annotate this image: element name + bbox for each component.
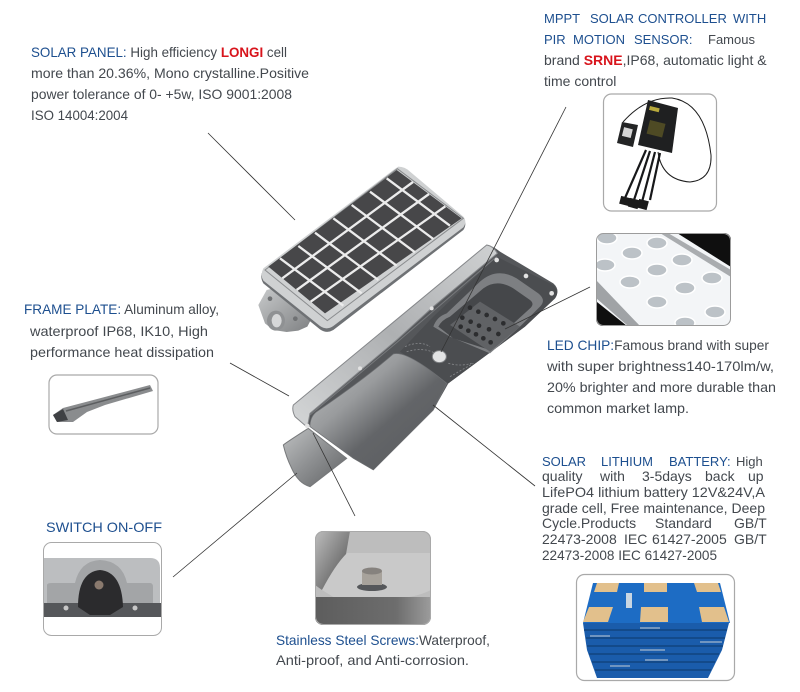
LED chip description: 20% brighter and more durable than: [547, 379, 776, 395]
battery description: up: [748, 468, 764, 484]
controller description: Famous: [708, 32, 755, 47]
LED chip description: common market lamp.: [547, 400, 689, 416]
controller description: MOTION: [573, 32, 625, 47]
battery description: back: [705, 468, 736, 484]
switch heading: SWITCH ON-OFF: [46, 519, 162, 535]
controller description: WITH: [733, 11, 766, 26]
controller description: CONTROLLER: [638, 11, 727, 26]
photo: switch: [44, 558, 161, 617]
solar panel description: SOLAR PANEL: High efficiency LONGI cell: [31, 44, 287, 60]
leader lines: [173, 107, 590, 577]
LED chip description: LED CHIP:Famous brand with super: [547, 337, 769, 353]
photo: battery pack: [576, 574, 734, 680]
battery description: with: [599, 468, 625, 484]
battery description: BATTERY:: [669, 454, 731, 469]
battery description: 22473-2008: [542, 531, 617, 547]
solar panel description: power tolerance of 0- +5w, ISO 9001:2008: [31, 86, 292, 102]
battery description: 3-5days: [642, 468, 692, 484]
stainless screws description: [276, 632, 490, 668]
battery description: High: [736, 454, 763, 469]
photo: LED chip: [595, 232, 731, 329]
controller description: SOLAR: [590, 11, 634, 26]
battery description: SOLAR: [542, 454, 586, 469]
battery description: [542, 454, 767, 563]
frame plate description: FRAME PLATE: Aluminum alloy,: [24, 301, 219, 317]
battery description: Cycle.Products: [542, 515, 636, 531]
controller description: MPPT: [544, 11, 580, 26]
LED chip description: [546, 337, 776, 416]
photo: stainless screw: [315, 531, 431, 625]
stainless screws description: Anti-proof, and Anti-corrosion.: [276, 652, 469, 668]
lamp body product: [283, 245, 557, 487]
controller description: SENSOR:: [634, 32, 693, 47]
photo: controller: [604, 94, 716, 211]
battery description: GB/T: [734, 531, 767, 547]
battery description: IEC: [624, 531, 647, 547]
frame plate description: waterproof IP68, IK10, High: [29, 323, 208, 339]
controller description: SRNE,IP68, automatic light &: [584, 52, 767, 68]
controller description: brand: [544, 52, 584, 68]
battery description: 22473-2008 IEC 61427-2005: [542, 547, 717, 563]
controller description: PIR: [544, 32, 566, 47]
battery description: 61427-2005: [652, 531, 727, 547]
photo: frame plate: [49, 375, 158, 434]
battery description: LITHIUM: [601, 454, 653, 469]
battery description: quality: [542, 468, 582, 484]
battery description: LifePO4 lithium battery 12V&24V,A: [542, 484, 766, 500]
frame plate description: [24, 301, 219, 360]
battery description: Standard: [655, 515, 712, 531]
solar panel product: [258, 167, 465, 332]
battery description: grade cell, Free maintenance, Deep: [542, 500, 765, 516]
solar panel description: more than 20.36%, Mono crystalline.Positive: [31, 65, 309, 81]
controller description: time control: [544, 73, 616, 89]
frame plate description: performance heat dissipation: [30, 344, 214, 360]
battery description: GB/T: [734, 515, 767, 531]
stainless screws description: Stainless Steel Screws:Waterproof,: [276, 632, 490, 648]
LED chip description: with super brightness140-170lm/w,: [546, 358, 774, 374]
solar panel description: ISO 14004:2004: [31, 107, 128, 123]
solar panel description: [31, 44, 309, 123]
controller description: [544, 11, 767, 89]
